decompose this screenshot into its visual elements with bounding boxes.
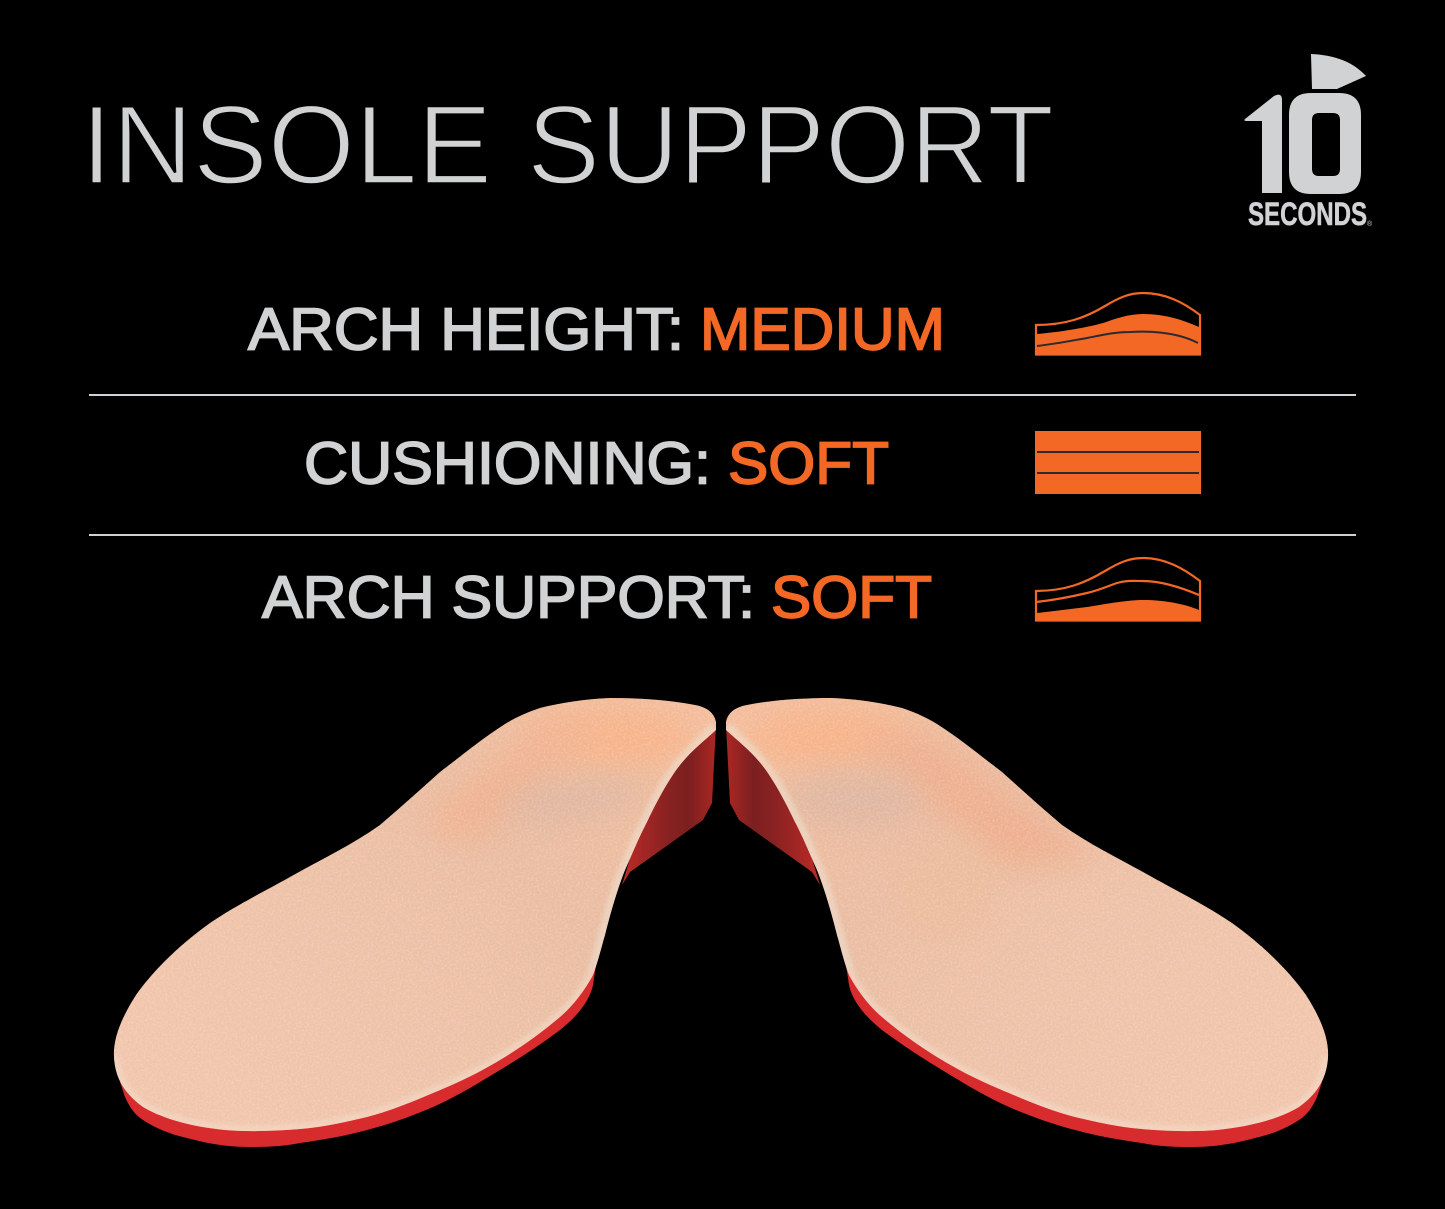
logo wordmark: SECONDS (1248, 196, 1367, 232)
right insole red underside (846, 965, 1322, 1147)
logo numeral one (1244, 95, 1282, 193)
label: cushioning soft: SOFT (728, 430, 889, 496)
left insole top surface (114, 698, 716, 1131)
left insole red underside (120, 965, 596, 1147)
insole: left (100, 690, 730, 1147)
label: arch support soft: ARCH SUPPORT: (262, 564, 755, 630)
icon: soft arch support profile (1036, 558, 1200, 621)
left insole shading (100, 690, 730, 1140)
logo registered mark: ® (1367, 220, 1373, 228)
row: arch support (262, 558, 1200, 630)
title: INSOLE (81, 82, 492, 208)
insole: right (712, 690, 1342, 1147)
label: cushioning soft (304, 430, 889, 496)
logo: 10 Seconds (1244, 54, 1373, 232)
label: cushioning soft: CUSHIONING: (304, 430, 711, 496)
right insole shading (712, 690, 1342, 1140)
logo numeral zero (1289, 93, 1361, 194)
logo arrowhead (1311, 54, 1366, 89)
title: SUPPORT (527, 82, 1054, 208)
right insole top surface (726, 698, 1328, 1131)
row: cushioning (304, 430, 1201, 496)
label: arch height medium (248, 296, 945, 362)
right insole heel wall (726, 725, 820, 885)
label: arch height medium: ARCH HEIGHT: (248, 296, 684, 362)
label: arch height medium: MEDIUM (700, 296, 945, 362)
label: arch support soft: SOFT (771, 564, 932, 630)
title (81, 82, 1054, 208)
divider (89, 394, 1356, 396)
left insole heel wall (622, 725, 716, 885)
icon: medium arch height profile (1036, 293, 1200, 355)
divider (89, 534, 1356, 536)
row: arch height (248, 293, 1200, 362)
icon: soft cushioning layers (1035, 431, 1201, 494)
